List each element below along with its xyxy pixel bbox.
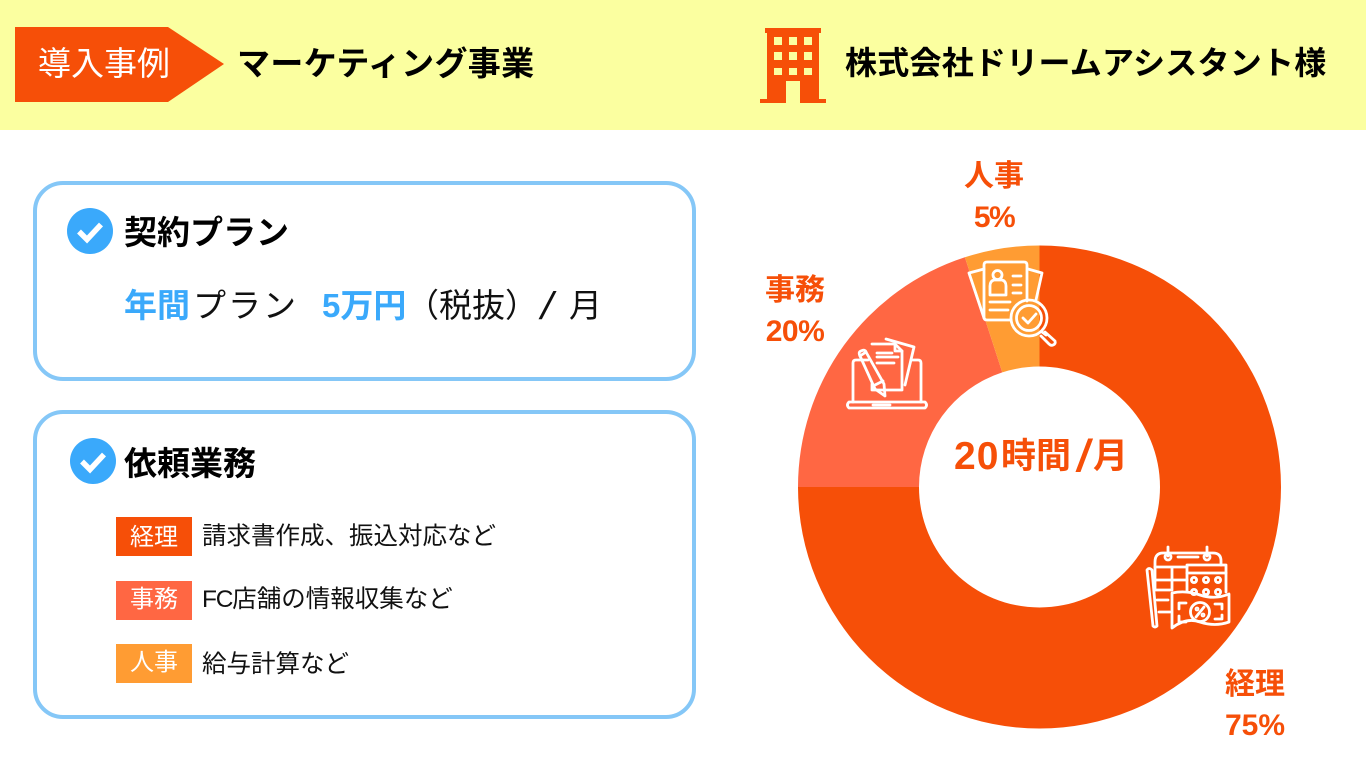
label: office 20%: 事務 [765, 274, 825, 307]
tag: HR: 人事 [130, 649, 178, 676]
heading: requested work: 依頼業務 [124, 445, 256, 482]
tag: accounting: 経理 [130, 524, 178, 551]
tag: office work: 事務 [130, 586, 178, 613]
label: HR 5%: 5% [974, 201, 1014, 234]
badge text: 導入事例 [38, 45, 170, 82]
donut chart [798, 246, 1281, 728]
label: office 20% [765, 274, 825, 348]
tag: accounting [116, 517, 192, 556]
slice: HR 5% [965, 246, 1040, 372]
text: HR tasks: 給与計算など [202, 651, 349, 678]
center label: total hours: / [1075, 427, 1094, 476]
badge arrow: case study [15, 27, 224, 102]
label: HR 5% [964, 160, 1024, 234]
icon: calendar, ledger and money [1147, 547, 1229, 628]
label: office 20%: 20% [766, 315, 824, 348]
slice: accounting 75% [798, 246, 1281, 728]
text: plan price: / [538, 281, 557, 323]
text: plan price [124, 281, 602, 324]
tag: office work [116, 581, 192, 620]
icon: check badge plan [67, 208, 113, 254]
icon: HR documents with magnifier [969, 262, 1055, 345]
panel: contract plan [33, 181, 696, 381]
label: accounting 75%: 75% [1225, 709, 1285, 742]
label: accounting 75%: 経理 [1225, 668, 1285, 701]
center label: total hours: 20 [954, 435, 999, 478]
text: plan price: プラン [193, 287, 298, 324]
slice: office 20% [798, 257, 1002, 487]
header band [0, 0, 1366, 130]
text: plan price: （税抜） [406, 287, 538, 324]
icon: office building [760, 28, 826, 103]
text: plan price: 5万円 [322, 287, 406, 324]
center label: total hours: 月 [1093, 437, 1128, 476]
label: HR 5%: 人事 [964, 160, 1024, 193]
text: office tasks: FC店舗の情報収集など [202, 586, 453, 613]
heading: company name: 株式会社ドリームアシスタント様 [845, 45, 1327, 81]
text: plan price: 月 [569, 287, 602, 324]
label: accounting 75% [1225, 668, 1285, 742]
icon: check badge work [70, 438, 116, 484]
panel: requested work [33, 410, 696, 719]
icon: laptop with documents and pen [848, 339, 926, 408]
heading: contract plan: 契約プラン [124, 214, 289, 251]
center label: total hours: 時間 [1001, 437, 1071, 476]
text: accounting tasks: 請求書作成、振込対応など [202, 523, 496, 550]
heading: business type: マーケティング事業 [237, 45, 535, 82]
center label: total hours [954, 427, 1128, 478]
text: plan price: 年間 [124, 287, 190, 324]
tag: HR [116, 644, 192, 683]
